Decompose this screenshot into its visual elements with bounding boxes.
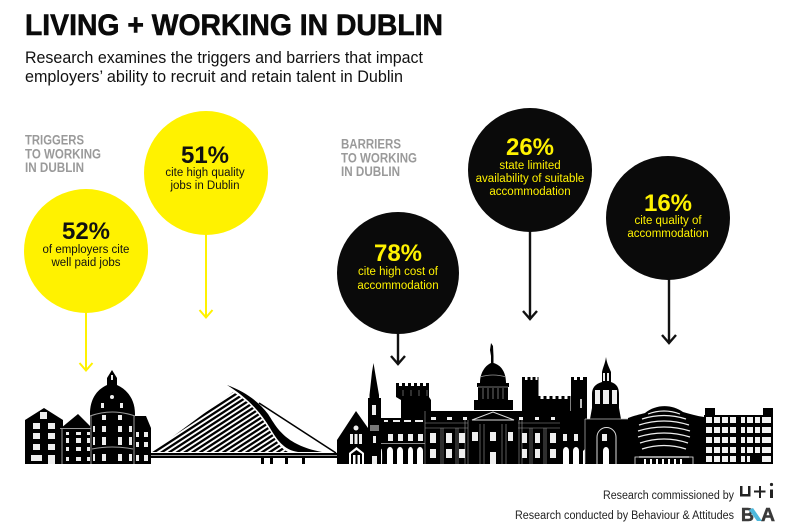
- title: LIVING + WORKING IN DUBLIN: [25, 9, 443, 42]
- arrow: 78%: [391, 325, 405, 364]
- subtitle: employers’ ability to recruit and retain talent in Dublin: [25, 67, 403, 86]
- heading: triggers: TRIGGERS: [25, 132, 84, 148]
- skyline: church and spire: [337, 363, 381, 464]
- callout: 26%: availability of suitable: [476, 173, 584, 185]
- callout: 51%: 51%: [181, 142, 229, 169]
- callout: 52%: well paid jobs: [50, 257, 121, 269]
- callout: 78%: 78%: [374, 240, 422, 267]
- credit: conducted by: Research conducted by Behaviour & Attitudes: [515, 510, 734, 522]
- callout: 16%: [606, 156, 730, 280]
- heading: triggers: [25, 132, 101, 175]
- heading: barriers: BARRIERS: [341, 136, 401, 152]
- heading: triggers: IN DUBLIN: [25, 160, 84, 175]
- arrow: 51%: [200, 225, 212, 318]
- heading: barriers: [341, 136, 417, 179]
- callout: 26%: accommodation: [489, 186, 571, 198]
- credit: commissioned by: Research commissioned by: [603, 490, 734, 502]
- callout: 16%: 16%: [644, 190, 692, 217]
- subtitle: [25, 48, 423, 86]
- callout: 51%: cite high quality: [165, 167, 245, 179]
- skyline: castle tower and wing: [381, 383, 431, 464]
- logo: B&A: B: [741, 505, 754, 525]
- heading: barriers: TO WORKING: [341, 150, 417, 166]
- callout: 78%: cite high cost of: [358, 266, 439, 278]
- callout: 26%: [468, 108, 592, 232]
- callout: 52%: 52%: [62, 218, 110, 245]
- skyline: Samuel Beckett bridge: [151, 385, 337, 464]
- logo: u+i: [740, 483, 773, 498]
- callout: 52%: of employers cite: [43, 244, 129, 256]
- callout: 78%: accommodation: [357, 280, 439, 292]
- skyline: left houses and domed tower: [25, 370, 151, 464]
- subtitle: Research examines the triggers and barriers that impact: [25, 48, 423, 67]
- arrow: 52%: [80, 300, 92, 370]
- heading: triggers: TO WORKING: [25, 146, 101, 162]
- skyline: convention centre: [628, 406, 704, 464]
- arrow: 26%: [523, 225, 537, 319]
- callout: 52%: [24, 189, 148, 313]
- callout: 78%: [337, 212, 459, 334]
- callout: 51%: [144, 111, 268, 235]
- callout: 16%: accommodation: [627, 228, 709, 240]
- logo: B&A: A: [761, 505, 775, 525]
- callout: 26%: 26%: [506, 134, 554, 161]
- skyline: chapel with cupola: [560, 357, 628, 464]
- callout: 16%: cite quality of: [634, 215, 702, 227]
- callout: 51%: jobs in Dublin: [169, 180, 240, 192]
- skyline: central domed building: [425, 343, 585, 464]
- callout: 26%: state limited: [499, 160, 561, 172]
- arrow: 16%: [662, 270, 676, 343]
- heading: barriers: IN DUBLIN: [341, 164, 400, 179]
- skyline: office block: [704, 408, 773, 464]
- logo: B&A: [741, 505, 775, 525]
